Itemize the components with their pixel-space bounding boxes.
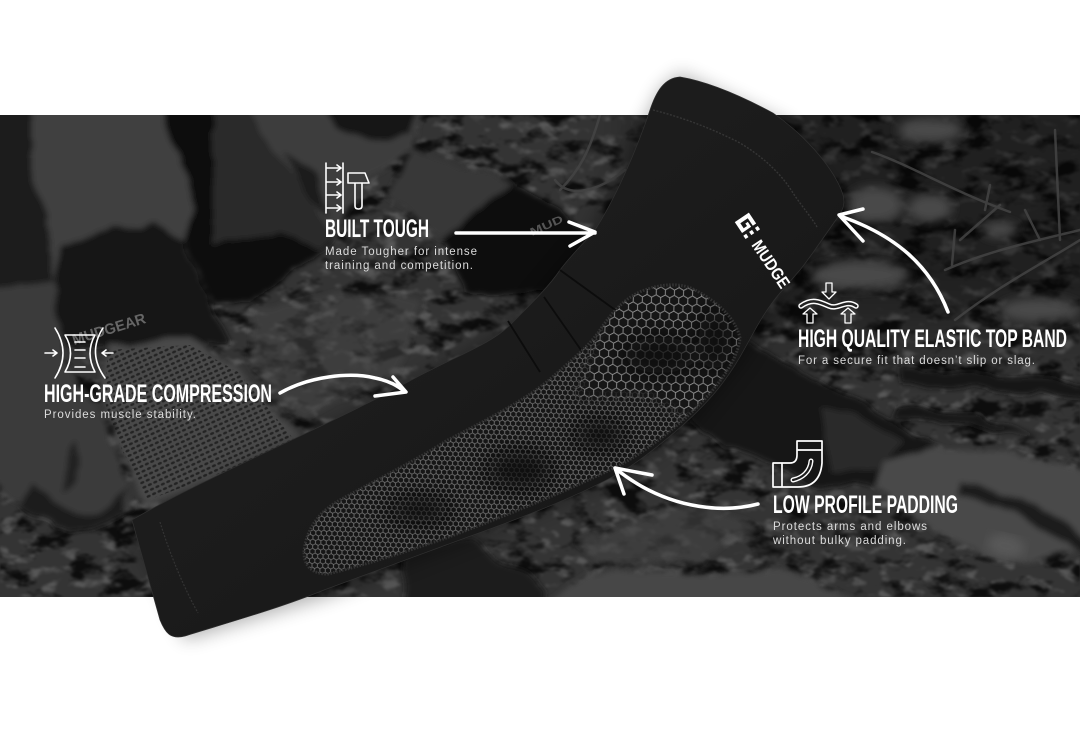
background forearm sleeve branding: MUD (528, 214, 565, 239)
thumbnail of fingernail (990, 536, 1022, 558)
compression sleeve on athlete (52, 225, 232, 350)
description: training and competition. (325, 260, 473, 272)
right hand (873, 447, 1080, 565)
arrow (839, 209, 948, 312)
callout: elastic top band (798, 209, 1067, 367)
sleeve drop shadow (132, 73, 850, 640)
background photo: muddy obstacle course athlete (0, 115, 1080, 597)
dark torso (160, 105, 335, 302)
sleeve logo wordmark: MUDGE (748, 237, 794, 292)
glove base (100, 340, 300, 505)
heading: LOW PROFILE PADDING (773, 491, 958, 519)
pad mesh border (304, 285, 740, 574)
callout: built tough (325, 163, 595, 272)
description: Made Tougher for intense (325, 246, 477, 258)
sleeve body (132, 77, 844, 637)
arrow (280, 375, 406, 396)
upper left shoulder area (0, 105, 52, 292)
arrow (615, 468, 758, 508)
icon: compression (45, 328, 113, 378)
pad dark mottling (390, 310, 731, 522)
icon: wall and hammer (326, 163, 369, 213)
glove texture (104, 345, 296, 500)
callout: low profile padding (615, 441, 958, 547)
right dark forearm (680, 340, 937, 487)
icon: padded elbow (773, 441, 822, 487)
mud streaks (900, 365, 1080, 400)
left arm and fist (0, 283, 135, 530)
description: without bulky padding. (772, 535, 906, 547)
infographic canvas (0, 66, 1080, 647)
roots and branches (555, 115, 1080, 320)
bright mud near shoulder (250, 290, 420, 420)
product: compression arm sleeve (132, 77, 844, 637)
heading: BUILT TOUGH (325, 215, 429, 243)
snowy mud blobs upper right (810, 118, 1080, 322)
elbow folds (508, 270, 618, 372)
description: Protects arms and elbows (773, 521, 927, 533)
description: For a secure fit that doesn’t slip or slag. (798, 355, 1035, 367)
sleeve logo mark (734, 213, 760, 239)
bottom leg and mud (405, 540, 545, 607)
padded honeycomb zone (304, 285, 740, 574)
icon: elastic band (801, 283, 856, 323)
description: Provides muscle stability. (44, 409, 196, 421)
stitched top band seam (653, 110, 817, 227)
stitched cuff seam (160, 522, 198, 613)
background forearm (387, 150, 513, 240)
background sleeve branding: MUDGEAR (70, 310, 148, 349)
callout: compression (44, 328, 406, 421)
arrow (456, 222, 595, 246)
heading: HIGH-GRADE COMPRESSION (44, 380, 272, 408)
